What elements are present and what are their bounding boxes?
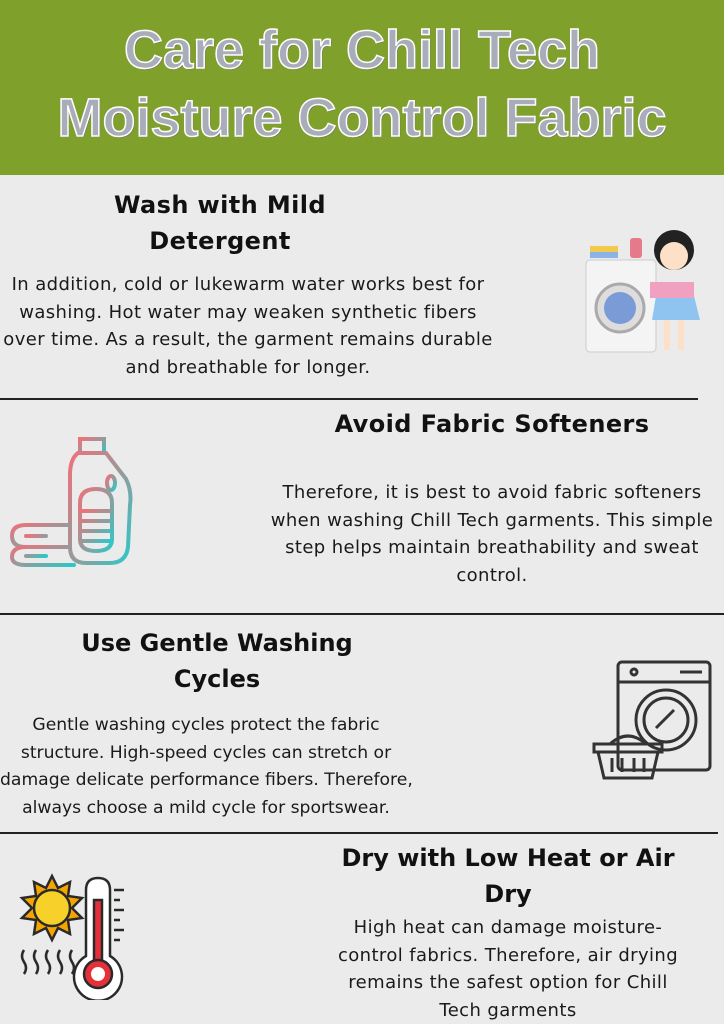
section 4 text: Tech garments xyxy=(439,1000,577,1020)
title xyxy=(57,20,667,148)
icon: detergent bottle and towels xyxy=(10,437,132,567)
header banner xyxy=(0,0,724,175)
section 1 text: washing. Hot water may weaken synthetic fibers xyxy=(19,302,477,322)
section 1 heading: Detergent xyxy=(149,227,291,255)
section 4 text xyxy=(338,917,678,1020)
section 4 text: remains the safest option for Chill xyxy=(348,972,668,993)
title: Care for Chill Tech xyxy=(124,20,600,80)
section 1 text: over time. As a result, the garment remains durable xyxy=(3,329,493,350)
section 3 heading xyxy=(81,629,353,693)
section 4 text: control fabrics. Therefore, air drying xyxy=(338,944,678,966)
section 3 heading: Use Gentle Washing xyxy=(81,629,353,657)
section 2 text: step helps maintain breathability and sweat xyxy=(285,537,699,558)
section 3 text: always choose a mild cycle for sportswear. xyxy=(22,798,390,818)
section 4 heading xyxy=(341,844,675,908)
icon: washing machine with basket xyxy=(592,660,712,780)
section 4 text: High heat can damage moisture- xyxy=(354,917,662,938)
section 2 text: when washing Chill Tech garments. This simple xyxy=(271,510,713,530)
icon: washing machine with girl xyxy=(586,230,700,352)
section 3 text: damage delicate performance fibers. Therefore, xyxy=(0,770,413,790)
section 3 heading: Cycles xyxy=(174,665,260,693)
section 4 heading: Dry xyxy=(484,880,532,908)
section 1 heading: Wash with Mild xyxy=(114,191,326,219)
section 1 text xyxy=(3,274,493,378)
section 2 text: control. xyxy=(456,564,528,586)
section 3 text xyxy=(0,715,413,818)
section 3 text: structure. High-speed cycles can stretch or xyxy=(21,742,391,762)
section 1 text: In addition, cold or lukewarm water works best for xyxy=(12,274,484,295)
section 1 text: and breathable for longer. xyxy=(125,356,371,378)
section 4 heading: Dry with Low Heat or Air xyxy=(341,844,675,872)
section 3 text: Gentle washing cycles protect the fabric xyxy=(32,715,380,735)
section 2 heading: Avoid Fabric Softeners xyxy=(335,410,649,438)
title: Moisture Control Fabric xyxy=(57,88,667,148)
icon: sun and thermometer xyxy=(19,873,124,1000)
section 2 text xyxy=(271,482,713,586)
section 2 text: Therefore, it is best to avoid fabric softeners xyxy=(282,482,702,503)
section 1 heading xyxy=(114,191,326,255)
